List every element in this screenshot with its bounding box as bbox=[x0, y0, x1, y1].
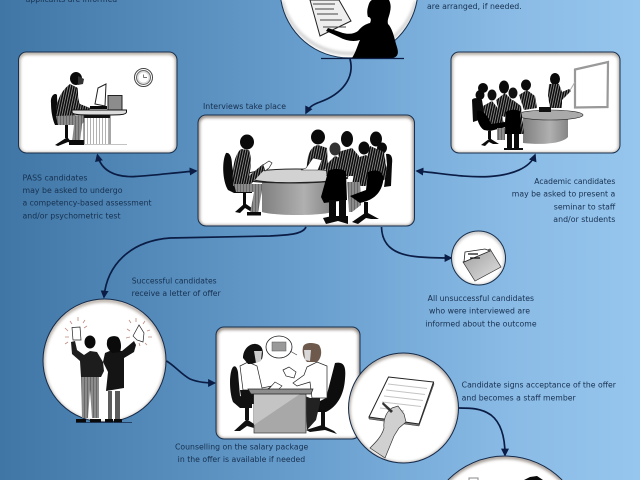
text: PASS candidates: a competency-based assessment bbox=[22, 199, 152, 208]
text: unsuccessful candidates: who were interviewed are bbox=[429, 307, 530, 316]
text: academic candidates: Academic candidates bbox=[534, 177, 615, 186]
arrow: interviews to letter of offer bbox=[104, 227, 306, 297]
text: counselling on salary bbox=[175, 442, 309, 464]
text: PASS candidates: PASS candidates bbox=[22, 174, 88, 182]
text: successful candidates: Successful candidates bbox=[132, 276, 217, 285]
text: PASS candidates: may be asked to undergo bbox=[22, 186, 123, 195]
icon: speech bubble bbox=[266, 336, 297, 358]
icon: candidate silhouette bbox=[223, 134, 272, 216]
text: PASS candidates: and/or psychometric test bbox=[22, 212, 120, 220]
icon: man being advised bbox=[283, 343, 345, 434]
icon: woman adviser bbox=[230, 344, 282, 431]
text: successful candidates bbox=[132, 276, 222, 298]
icon: interview panel silhouettes bbox=[301, 130, 392, 224]
icon: document held up bbox=[310, 0, 351, 36]
text: counselling on salary: in the offer is available if needed bbox=[178, 455, 305, 464]
arrow: circle to interviews bbox=[306, 59, 351, 113]
arrow: PASS to interviews bbox=[98, 155, 196, 177]
icon: interview table bbox=[244, 169, 348, 215]
icon: staff member at work bbox=[524, 476, 543, 480]
icon: small grey detail bbox=[469, 478, 478, 480]
icon: man with letter bbox=[71, 327, 104, 422]
panel: new staff member circle bbox=[448, 456, 562, 480]
icon: presenter silhouette bbox=[548, 73, 571, 108]
ground line bbox=[76, 422, 132, 424]
ground line bbox=[321, 58, 404, 60]
arrow: offer to counselling bbox=[166, 361, 214, 383]
arrow: interviews to academic seminar bbox=[417, 155, 535, 177]
icon: projection screen bbox=[569, 62, 608, 108]
icon: sparkle rays around letters bbox=[65, 317, 152, 346]
icon: desk bbox=[248, 389, 313, 433]
heading: interviews take place: Interviews take place bbox=[203, 102, 286, 111]
text: arrangements: are arranged, if needed. bbox=[427, 2, 522, 11]
text: academic candidates: and/or students bbox=[553, 215, 615, 224]
panel: signing acceptance circle bbox=[348, 353, 458, 464]
text: counselling on salary: Counselling on the salary package bbox=[175, 442, 309, 451]
text: signs acceptance bbox=[462, 381, 617, 402]
text: unsuccessful candidates: All unsuccessful candidates bbox=[428, 294, 534, 303]
arrow: interviews to outcome letter bbox=[382, 227, 451, 258]
panel: interviews bbox=[198, 115, 414, 227]
panel: PASS candidates test bbox=[18, 52, 177, 154]
text: PASS candidates bbox=[22, 174, 152, 220]
icon: woman with letter bbox=[103, 325, 144, 422]
panel: offer letter circle bbox=[43, 299, 166, 424]
icon: audience silhouettes bbox=[472, 80, 537, 150]
text: signs acceptance: Candidate signs acceptance of the offer bbox=[462, 381, 617, 390]
arrow: signing to staff member bbox=[459, 408, 505, 455]
panel: counselling on salary bbox=[216, 327, 360, 440]
icon: person at a computer desk bbox=[51, 72, 127, 146]
text: academic candidates: may be asked to present a bbox=[512, 190, 616, 199]
text: signs acceptance: and becomes a staff member bbox=[462, 393, 577, 402]
icon: wall clock bbox=[134, 68, 152, 86]
text: unsuccessful candidates: informed about the outcome bbox=[425, 319, 537, 328]
text: academic candidates bbox=[512, 177, 616, 224]
icon: seminar table bbox=[517, 107, 583, 144]
panel: applicant circle at top bbox=[281, 0, 417, 58]
icon: envelope bbox=[463, 249, 501, 281]
icon: hand signing with pen bbox=[370, 402, 406, 458]
icon: woman silhouette presenting bbox=[326, 0, 398, 58]
panel: outcome envelope circle bbox=[452, 231, 506, 286]
icon: contract paper bbox=[369, 377, 434, 426]
text: academic candidates: seminar to staff bbox=[554, 202, 616, 211]
text: successful candidates: receive a letter of offer bbox=[132, 289, 222, 298]
text: unsuccessful candidates bbox=[425, 294, 537, 328]
panel: academic seminar bbox=[451, 52, 620, 154]
